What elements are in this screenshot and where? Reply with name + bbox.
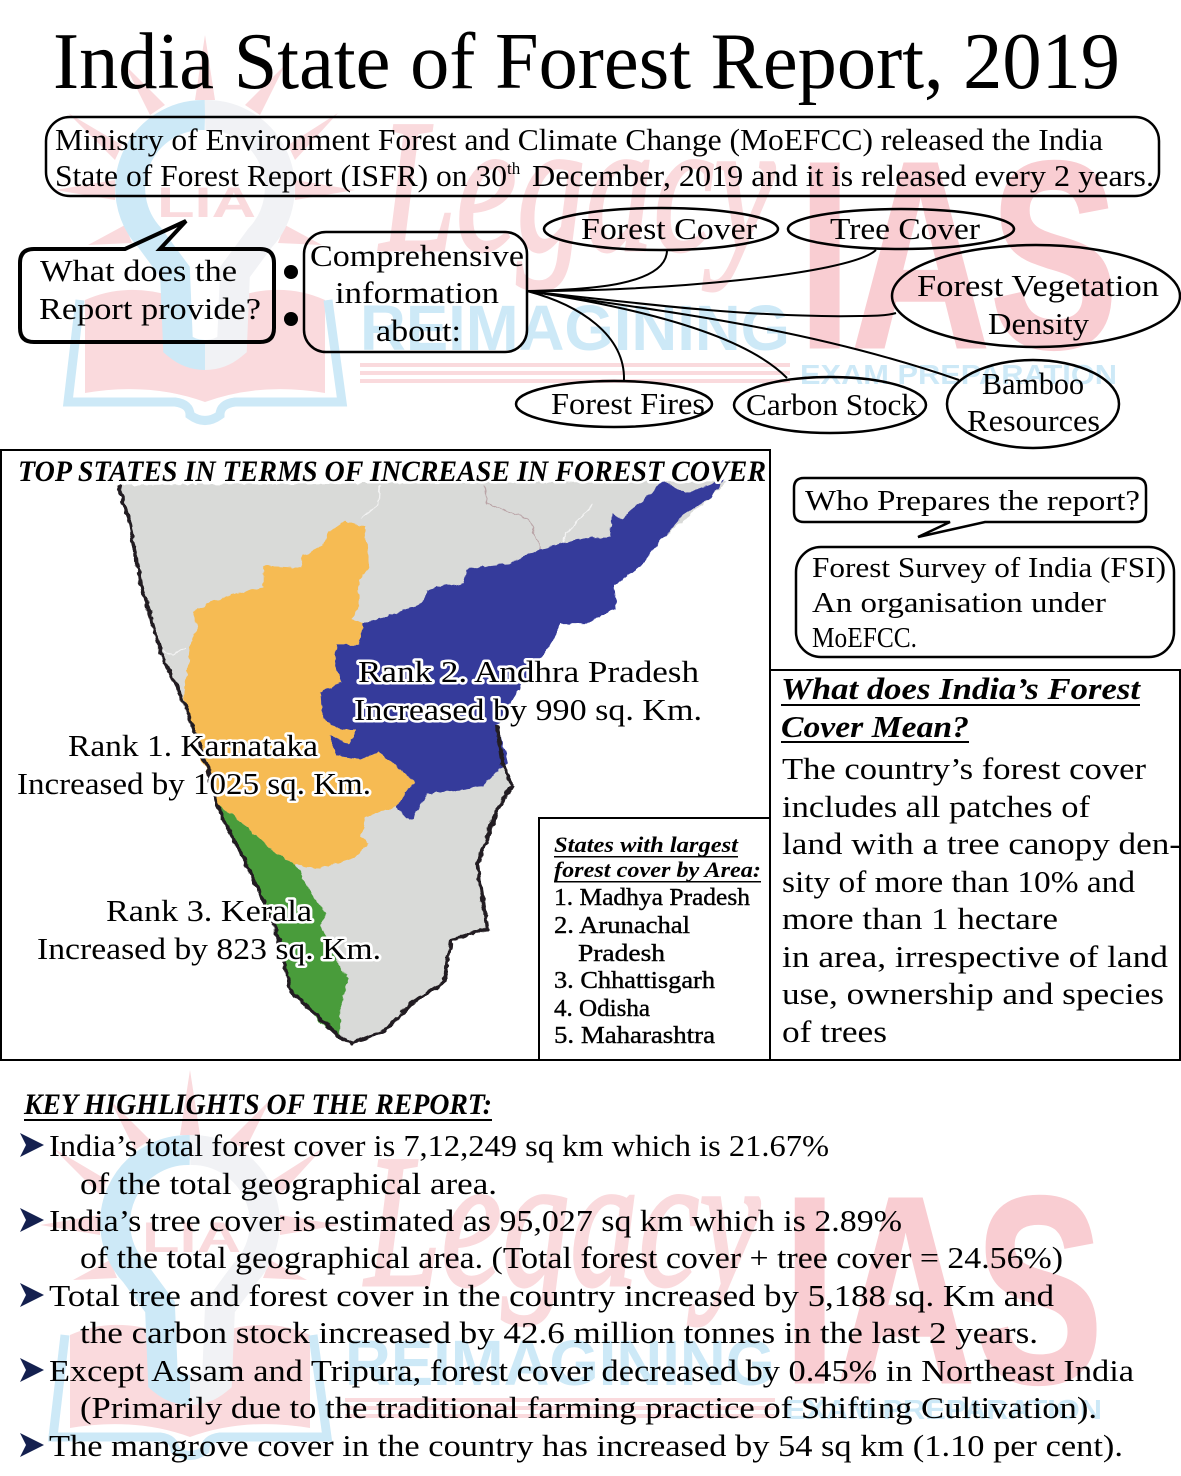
label: rank 3 Kerala: Increased by 823 sq. Km. — [37, 931, 381, 966]
watermark: bottom Legacy IAS logo — [40, 1070, 1103, 1456]
callout: what does the report provide: Report provide? — [39, 291, 261, 326]
label: rank 2 Andhra Pradesh: Rank 2. Andhra Pradesh — [358, 654, 700, 689]
callout: who prepares the report: Who Prepares the report? — [805, 485, 1140, 517]
map: south India — [118, 479, 726, 1043]
highlight: northeast decrease: (Primarily due to the traditional farming practice of Shifting Cultivation). — [80, 1390, 1097, 1425]
text: forest cover definition: more than 1 hectare — [782, 901, 1058, 936]
panel: what does forest cover mean — [770, 670, 1181, 1060]
highlight: northeast decrease — [20, 1353, 1134, 1425]
highlight: forest cover — [20, 1128, 829, 1201]
topic: Bamboo Resources — [947, 360, 1119, 448]
highlight: forest cover: India’s total forest cover is 7,12,249 sq km which is 21.67% — [49, 1128, 829, 1163]
watermark: top Legacy IAS logo: EXAM PREPARATION — [800, 359, 1117, 390]
label: rank 2 Andhra Pradesh: Increased by 990 sq. Km. — [354, 692, 702, 727]
watermark: top Legacy IAS logo: LIA — [157, 179, 256, 227]
text: forest cover definition: use, ownership and species — [782, 976, 1164, 1011]
panel: report introduction — [46, 117, 1159, 196]
topic: Bamboo Resources: Resources — [967, 403, 1100, 438]
topic: Forest Cover: Forest Cover — [581, 211, 758, 246]
topic: Forest Fires: Forest Fires — [551, 386, 705, 421]
inset: states with largest forest cover: 5. Maharashtra — [554, 1023, 715, 1049]
topic: Tree Cover — [788, 209, 1014, 249]
list: key highlights — [20, 1128, 1134, 1463]
highlight: northeast decrease: Except Assam and Tripura, forest cover decreased by 0.45% in Northeast India — [49, 1353, 1134, 1388]
text: forest cover definition — [782, 751, 1181, 1049]
inset: states with largest forest cover: 2. Arunachal — [554, 913, 690, 939]
bullets — [284, 265, 298, 326]
text: forest cover definition: The country’s forest cover — [782, 751, 1147, 786]
box: Forest Survey of India — [796, 547, 1174, 657]
topic: Forest Vegetation Density: Density — [988, 306, 1090, 341]
text: forest cover definition: sity of more than 10% and — [782, 864, 1136, 899]
callout: what does the report provide: What does the — [40, 253, 237, 288]
inset: states with largest forest cover: 3. Chhattisgarh — [554, 968, 715, 994]
inset: states with largest forest cover — [539, 818, 770, 1060]
callout: what does the report provide — [20, 221, 274, 342]
topic: Forest Fires — [516, 381, 712, 427]
box: comprehensive information about — [304, 232, 527, 352]
highlight: tree cover: of the total geographical area. (Total forest cover + tree cover = 24.56%) — [80, 1240, 1063, 1275]
label: rank 3 Kerala — [37, 893, 381, 966]
topic: Forest Vegetation Density — [892, 245, 1180, 347]
inset: states with largest forest cover: 1. Madhya Pradesh — [554, 885, 750, 911]
text: forest cover definition: includes all patches of — [782, 789, 1091, 824]
inset: states with largest forest cover: States with largest — [554, 832, 739, 857]
box: comprehensive information about: about: — [376, 313, 461, 348]
watermark: top Legacy IAS logo — [55, 35, 1118, 420]
inset: states with largest forest cover: forest cover by Area: — [554, 857, 761, 882]
topic: Forest Cover — [544, 208, 778, 250]
topic: Forest Vegetation Density: Forest Vegetation — [917, 268, 1160, 303]
heading: top states: TOP STATES IN TERMS OF INCREASE IN FOREST COVER — [18, 455, 766, 488]
topic: Carbon Stock: Carbon Stock — [746, 387, 918, 422]
heading: key highlights: KEY HIGHLIGHTS OF THE REPORT: — [23, 1088, 492, 1121]
heading: forest cover meaning — [781, 671, 1142, 744]
highlight: increase and carbon stock: the carbon stock increased by 42.6 million tonnes in the last 2 years. — [80, 1315, 1038, 1350]
box: Forest Survey of India: An organisation under — [812, 587, 1106, 619]
text: introduction line 2 — [55, 158, 1154, 193]
highlight: increase and carbon stock — [20, 1278, 1055, 1350]
text: forest cover definition: in area, irrespective of land — [782, 939, 1169, 974]
label: rank 1 Karnataka: Increased by 1025 sq. Km. — [17, 766, 371, 801]
inset: states with largest forest cover: Pradesh — [578, 941, 665, 967]
label: rank 1 Karnataka — [17, 728, 371, 801]
state: Karnataka — [184, 521, 414, 869]
inset: states with largest forest cover: 4. Odisha — [554, 996, 650, 1022]
text: introduction line 2: December, 2019 and it is released every 2 years. — [532, 158, 1154, 193]
panel: top states map — [1, 450, 770, 1060]
box: comprehensive information about: information — [335, 275, 500, 310]
watermark: bottom Legacy IAS logo: Legacy — [363, 1117, 760, 1327]
label: rank 1 Karnataka: Rank 1. Karnataka — [68, 728, 318, 763]
topic: Bamboo Resources: Bamboo — [982, 366, 1084, 401]
heading: forest cover meaning: Cover Mean? — [781, 709, 969, 744]
watermark: bottom Legacy IAS logo: LIA — [142, 1214, 241, 1262]
highlight: increase and carbon stock: Total tree and forest cover in the country increased by 5,188 sq. Km and — [49, 1278, 1055, 1313]
box: Forest Survey of India: MoEFCC. — [812, 622, 917, 654]
text: forest cover definition: of trees — [782, 1014, 887, 1049]
topic: Carbon Stock — [734, 377, 926, 433]
highlight: forest cover: of the total geographical area. — [80, 1166, 497, 1201]
label: rank 2 Andhra Pradesh — [354, 654, 702, 727]
watermark: top Legacy IAS logo: Legacy — [378, 82, 775, 292]
box: comprehensive information about: Comprehensive — [310, 238, 524, 273]
watermark: bottom Legacy IAS logo: EXAM PREPARATION — [785, 1394, 1102, 1425]
highlight: tree cover: India’s tree cover is estimated as 95,027 sq km which is 2.89% — [49, 1203, 902, 1238]
text: introduction line 2: State of Forest Report (ISFR) on 30 — [55, 158, 507, 193]
box: Forest Survey of India: Forest Survey of India (FSI) — [812, 552, 1166, 584]
callout: who prepares the report — [794, 478, 1146, 537]
state: Andhra Pradesh — [320, 479, 724, 820]
watermark: top Legacy IAS logo: REIMAGINING — [360, 292, 790, 364]
text: forest cover definition: land with a tree canopy den- — [782, 826, 1181, 861]
watermark: bottom Legacy IAS logo: REIMAGINING — [345, 1327, 775, 1399]
highlight: mangrove cover: The mangrove cover in the country has increased by 54 sq km (1.10 per cent). — [49, 1428, 1123, 1463]
topic: Tree Cover: Tree Cover — [830, 211, 981, 246]
highlight: tree cover — [20, 1203, 1063, 1275]
label: rank 3 Kerala: Rank 3. Kerala — [106, 893, 312, 928]
text: introduction line 1: Ministry of Environment Forest and Climate Change (MoEFCC) released the India — [55, 122, 1103, 157]
heading: forest cover meaning: What does India’s Forest — [781, 671, 1142, 706]
text: introduction line 2: th — [507, 159, 521, 178]
connectors: topics branching from the box — [527, 250, 959, 380]
state: Kerala — [218, 805, 350, 1038]
title: India State of Forest Report, 2019 — [53, 18, 1120, 106]
